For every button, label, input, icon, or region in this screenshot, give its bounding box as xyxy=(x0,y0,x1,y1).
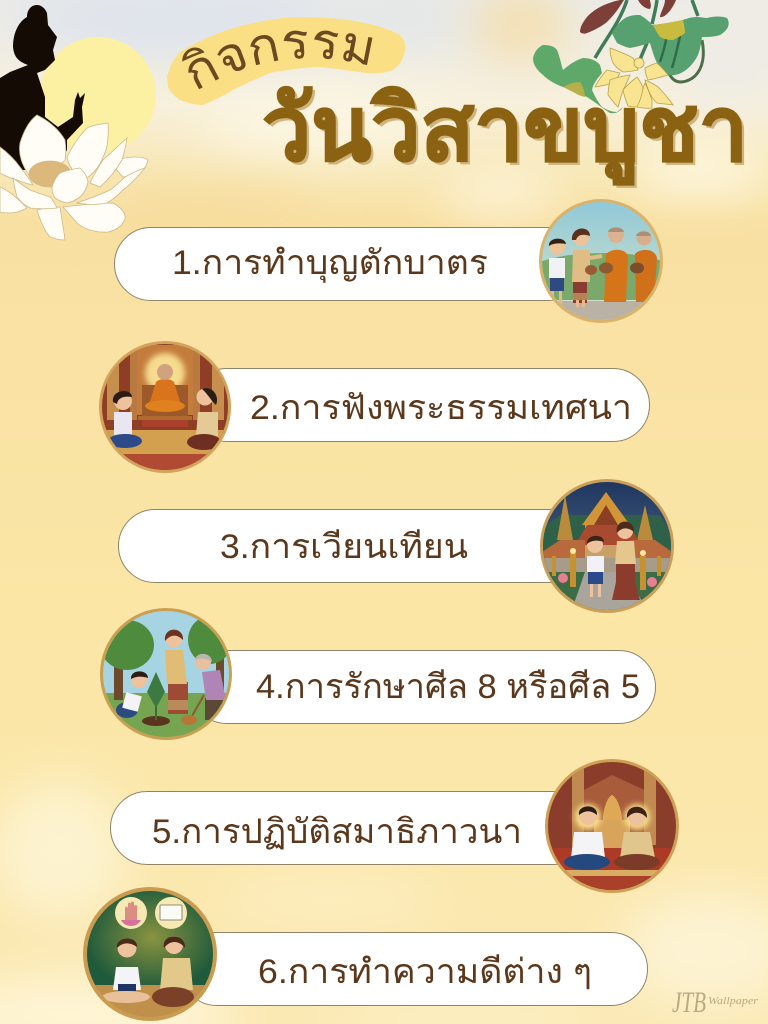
item 4 picture: tree planting xyxy=(100,605,235,743)
sun disc xyxy=(40,37,156,153)
item 2 label pill: 2.การฟังพระธรรมเทศนา xyxy=(250,389,632,427)
item 5 picture: meditation xyxy=(545,758,679,896)
item 6 picture: doing good deeds xyxy=(83,885,220,1024)
item 6 label pill xyxy=(180,932,648,1006)
item 1 label pill: 1.การทำบุญตักบาตร xyxy=(172,244,488,283)
item 2 picture: listening to a sermon xyxy=(99,340,231,475)
title: วันวิสาขบูชา xyxy=(265,83,751,188)
item 5 label pill: 5.การปฏิบัติสมาธิภาวนา xyxy=(152,813,522,851)
item 3 label pill xyxy=(118,510,588,582)
item 3 picture: candlelit procession xyxy=(540,479,674,615)
item 3 label pill: 3.การเวียนเทียน xyxy=(220,528,468,566)
title: วันวิสาขบูชา xyxy=(262,80,748,185)
item 2 label pill xyxy=(190,368,650,442)
signature: JTB xyxy=(672,986,706,1019)
subtitle badge: กิจกรรม xyxy=(182,30,372,90)
item 4 label pill: 4.การรักษาศีล 8 หรือศีล 5 xyxy=(256,668,640,706)
icon: lotus leaves, pods and yellow flower xyxy=(533,0,729,113)
icon: white lotus flower xyxy=(0,115,148,240)
item 5 label pill xyxy=(110,792,590,864)
signature xyxy=(672,986,759,1019)
signature: Wallpaper xyxy=(708,995,759,1007)
item 4 label pill xyxy=(190,650,656,724)
icon: Buddha silhouette xyxy=(0,5,85,170)
item 6 label pill: 6.การทำความดีต่าง ๆ xyxy=(258,953,592,991)
item 1 label pill xyxy=(114,228,584,300)
item 1 picture: alms giving xyxy=(539,199,664,325)
